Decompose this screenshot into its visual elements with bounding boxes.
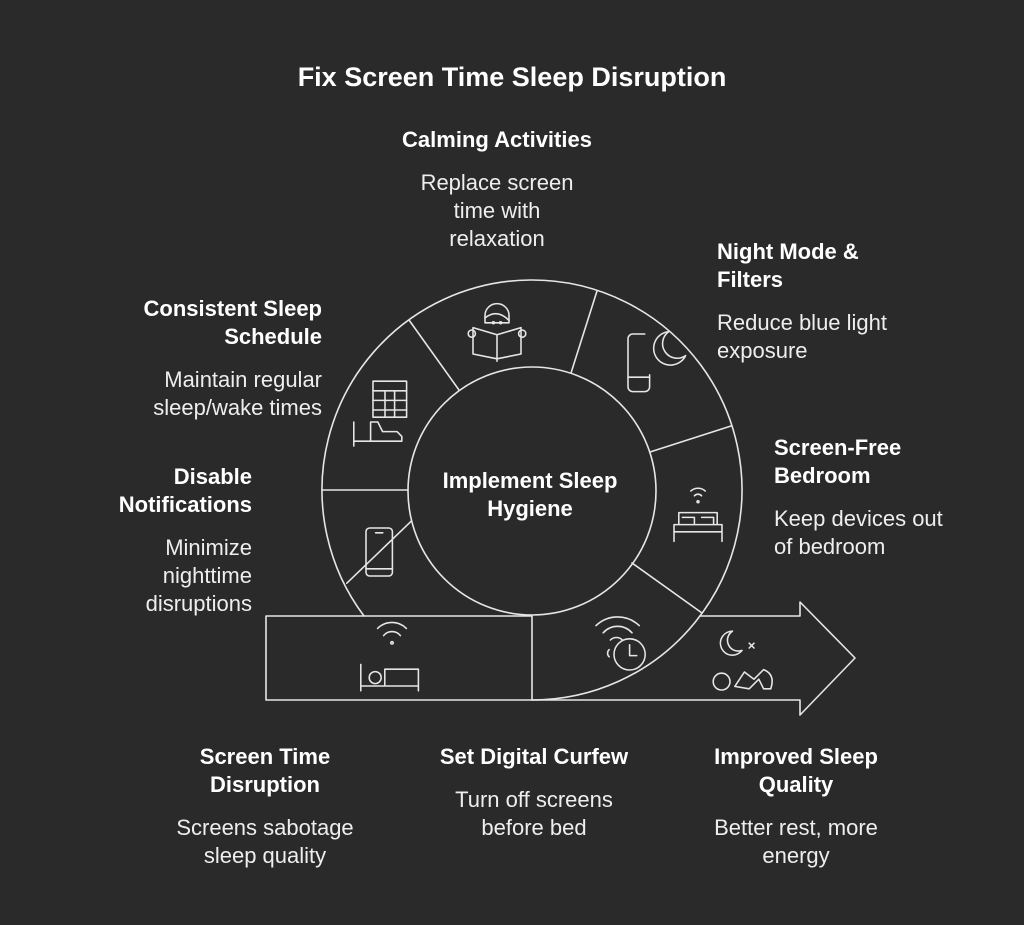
label: consistent schedule	[144, 296, 322, 420]
label: digital curfew	[440, 744, 628, 840]
label: digital curfew: Set Digital Curfew	[440, 744, 628, 769]
label: improved sleep: Improved Sleep	[714, 744, 878, 769]
ring outer arc	[322, 280, 742, 700]
label: improved sleep	[714, 744, 878, 868]
icon: reading person	[468, 304, 526, 361]
label: screen time disruption: Screen Time	[200, 744, 330, 769]
label: calming activities: Calming Activities	[402, 127, 592, 152]
label: night mode: Night Mode &	[717, 239, 859, 264]
label: screen-free bedroom: Keep devices out	[774, 506, 943, 531]
inner circle	[408, 367, 656, 615]
label: night mode: Filters	[717, 267, 783, 292]
label: screen-free bedroom	[774, 435, 943, 559]
label: calming activities: time with	[454, 198, 540, 223]
label: screen-free bedroom: Screen-Free	[774, 435, 901, 460]
label: digital curfew: before bed	[481, 815, 587, 840]
label: screen-free bedroom: of bedroom	[774, 534, 885, 559]
label: screen time disruption: Screens sabotage	[176, 815, 354, 840]
center label: Hygiene	[487, 496, 573, 521]
label: digital curfew: Turn off screens	[455, 787, 613, 812]
label: improved sleep: Quality	[759, 772, 833, 797]
label: screen time disruption: Disruption	[210, 772, 320, 797]
icon: phone with moon	[628, 332, 686, 392]
label: consistent schedule: Schedule	[224, 324, 322, 349]
icon: moon and resting person	[713, 631, 772, 690]
icon: bed with wifi	[674, 488, 722, 541]
label: screen-free bedroom: Bedroom	[774, 463, 871, 488]
icon: calendar and bed	[354, 381, 407, 446]
label: consistent schedule: sleep/wake times	[153, 395, 322, 420]
label: consistent schedule: Maintain regular	[164, 367, 322, 392]
center label	[443, 468, 617, 521]
icon: wifi over bed	[361, 622, 418, 691]
label: disable notifications: disruptions	[146, 591, 252, 616]
label: calming activities	[402, 127, 592, 251]
label: consistent schedule: Consistent Sleep	[144, 296, 322, 321]
label: disable notifications: nighttime	[163, 563, 252, 588]
label: calming activities: Replace screen	[421, 170, 573, 195]
label: disable notifications: Disable	[174, 464, 252, 489]
label: disable notifications: Notifications	[119, 492, 252, 517]
label: calming activities: relaxation	[449, 226, 545, 251]
arrow	[266, 616, 532, 700]
label: disable notifications	[119, 464, 252, 616]
label: night mode: Reduce blue light	[717, 310, 887, 335]
label: disable notifications: Minimize	[165, 535, 252, 560]
icon: phone slashed	[347, 521, 412, 583]
center label: Implement Sleep	[443, 468, 617, 493]
label: screen time disruption	[176, 744, 354, 868]
label: improved sleep: energy	[762, 843, 830, 868]
ring dividers	[322, 291, 731, 613]
label: improved sleep: Better rest, more	[714, 815, 878, 840]
label: night mode: exposure	[717, 338, 808, 363]
label: screen time disruption: sleep quality	[204, 843, 326, 868]
icon: wifi clock	[596, 617, 645, 670]
title: Fix Screen Time Sleep Disruption	[298, 62, 726, 92]
label: night mode	[717, 239, 887, 363]
